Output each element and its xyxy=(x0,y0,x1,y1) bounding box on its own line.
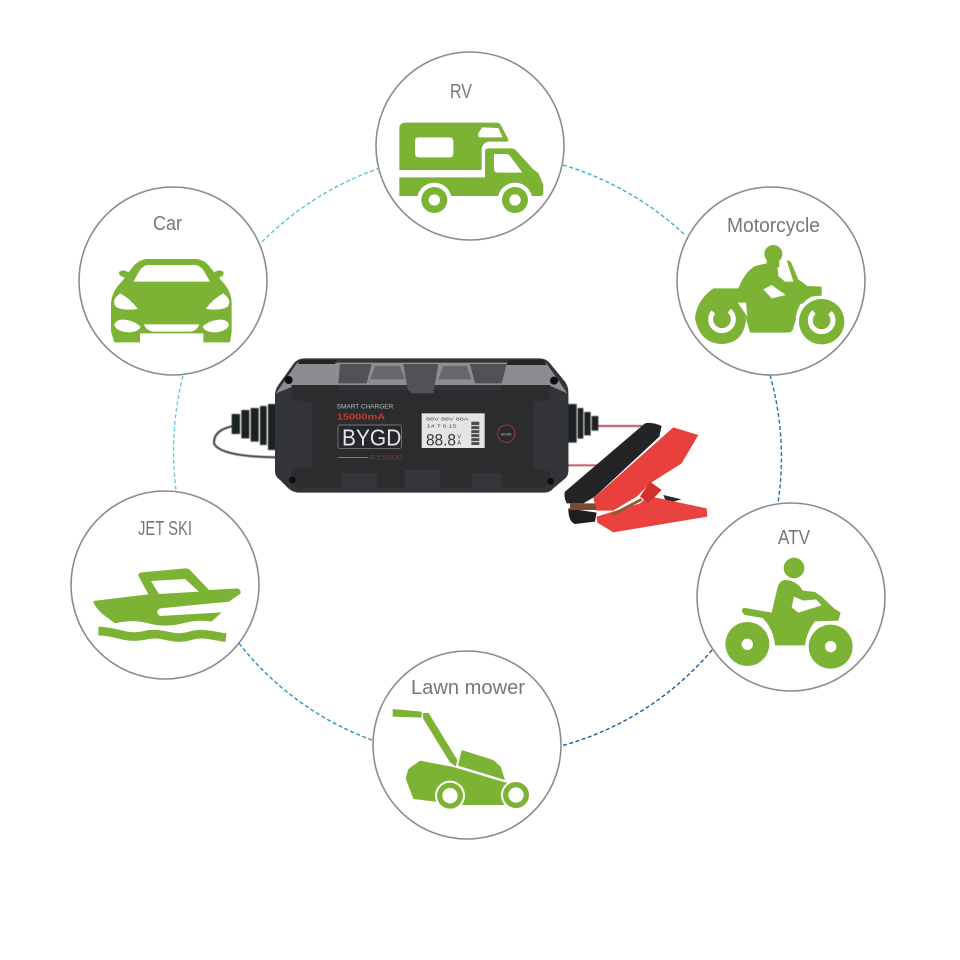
red clamp xyxy=(593,427,707,532)
charger body xyxy=(275,358,568,493)
icon: RV xyxy=(399,123,543,217)
icon: motorcycle xyxy=(695,245,844,344)
icon: ATV xyxy=(725,558,853,669)
dashed connecting ring xyxy=(174,165,781,746)
product text: F15000 xyxy=(370,453,403,462)
icon: lawn mower xyxy=(393,709,531,811)
product text xyxy=(337,405,403,462)
panel: JET SKI xyxy=(71,491,259,679)
label: ATV: ATV xyxy=(778,527,811,549)
LCD screen: 88.8 xyxy=(426,430,456,449)
panel: RV xyxy=(376,52,564,240)
label: Lawn mower: Lawn mower xyxy=(411,677,525,699)
cable and strain reliefs xyxy=(214,404,647,465)
LCD screen: 88V 88V 88A xyxy=(426,417,469,422)
black clamp xyxy=(564,423,682,524)
panel: ATV xyxy=(697,503,885,691)
product text: 15000mA xyxy=(337,411,386,421)
panel: Motorcycle xyxy=(677,187,865,375)
mode button xyxy=(498,425,515,442)
LCD screen: 14 7 6 15 xyxy=(427,423,457,428)
mode button: MODE xyxy=(501,432,512,436)
label: Motorcycle: Motorcycle xyxy=(727,215,820,237)
LCD screen xyxy=(422,413,485,449)
LCD screen: A xyxy=(457,440,461,446)
panel: Car xyxy=(79,187,267,375)
label: Car: Car xyxy=(153,213,182,235)
product text: SMART CHARGER xyxy=(337,405,394,411)
LCD screen: V xyxy=(457,434,461,440)
product text: BYGD xyxy=(342,424,401,450)
charger product photo xyxy=(214,358,707,532)
icon: jet ski boat xyxy=(93,568,241,638)
label: JET SKI: JET SKI xyxy=(138,518,192,540)
icon: car xyxy=(111,259,232,342)
label: RV: RV xyxy=(450,81,473,103)
panel: Lawn mower xyxy=(373,651,561,839)
